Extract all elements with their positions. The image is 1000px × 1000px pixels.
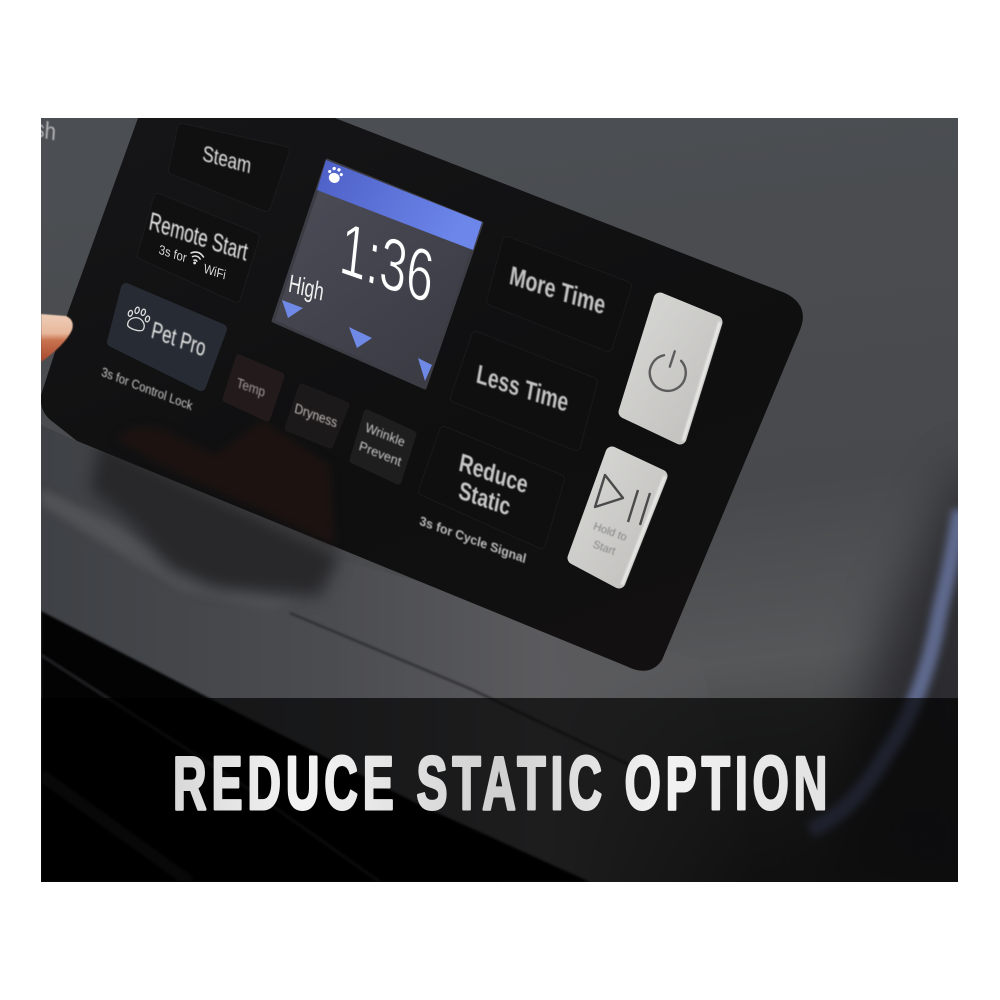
dryer body (41, 118, 958, 882)
title overlay band (41, 698, 958, 882)
display blue header band (317, 160, 482, 250)
dark panel (41, 118, 803, 671)
finger (41, 314, 73, 362)
lower groove line (290, 613, 640, 770)
icon: paw outline (127, 306, 150, 332)
button: Steam (189, 146, 290, 212)
icon: play pause (595, 475, 650, 525)
door highlight streaks (41, 655, 380, 882)
button: Temp (226, 358, 281, 418)
brand text fragment: sh (34, 115, 57, 147)
photo of dryer control panel (34, 115, 1000, 900)
button: Less Time (455, 336, 593, 446)
caption: 3s for Cycle Signal: 3s for Cycle Signal (418, 513, 528, 566)
button: start pause (574, 453, 665, 585)
light streak below panel (41, 492, 248, 598)
label: Hold to Start: Start (591, 539, 617, 558)
button: power (625, 299, 720, 441)
button: More Time: More Time (507, 260, 608, 320)
black door area (41, 611, 590, 882)
icon: white paw (328, 166, 343, 183)
icon: wifi (190, 251, 204, 264)
button: Pet Pro (112, 288, 222, 386)
label: High: High (287, 270, 326, 307)
button: More Time (491, 241, 627, 347)
button: Steam: Steam (201, 141, 253, 178)
button: Remote Start (142, 198, 255, 298)
caption: 3s for Control Lock: 3s for Control Lock (100, 364, 194, 413)
button: Remote Start: Remote Start (147, 207, 250, 267)
button bevel highlight (622, 476, 665, 585)
label: Hold to Start: Hold to (592, 521, 628, 544)
infographic canvas (41, 118, 958, 882)
blue edge reflection (810, 510, 960, 830)
label: Hold to Start (592, 522, 627, 556)
time readout: 1:36 (336, 207, 438, 320)
button bevel highlight (683, 322, 720, 441)
button: Wrinkle Prevent: Prevent (357, 438, 404, 469)
display screen (273, 160, 482, 388)
button: Reduce Static (423, 431, 560, 544)
display arrows (282, 300, 432, 381)
lower body strip (41, 425, 620, 882)
button: Reduce Static: Reduce (457, 449, 530, 500)
button: Wrinkle Prevent: Wrinkle (364, 420, 407, 450)
button: Dryness: Dryness (293, 400, 339, 431)
finger reflection in panel (117, 420, 335, 545)
button: Dryness (288, 387, 346, 445)
button: Temp: Temp (235, 374, 267, 400)
button: Wrinkle Prevent (353, 413, 413, 481)
button: Pet Pro: Pet Pro (149, 317, 208, 363)
dark reflection on lower body (90, 440, 340, 596)
button: Less Time: Less Time (474, 358, 571, 418)
button: Reduce Static: Static (456, 477, 513, 522)
title: REDUCE STATIC OPTION (173, 743, 832, 826)
dark right side shading (850, 468, 958, 762)
icon: power symbol (648, 350, 687, 392)
button: Remote Start: WiFi (203, 261, 227, 283)
button: Remote Start: 3s for (158, 242, 188, 266)
